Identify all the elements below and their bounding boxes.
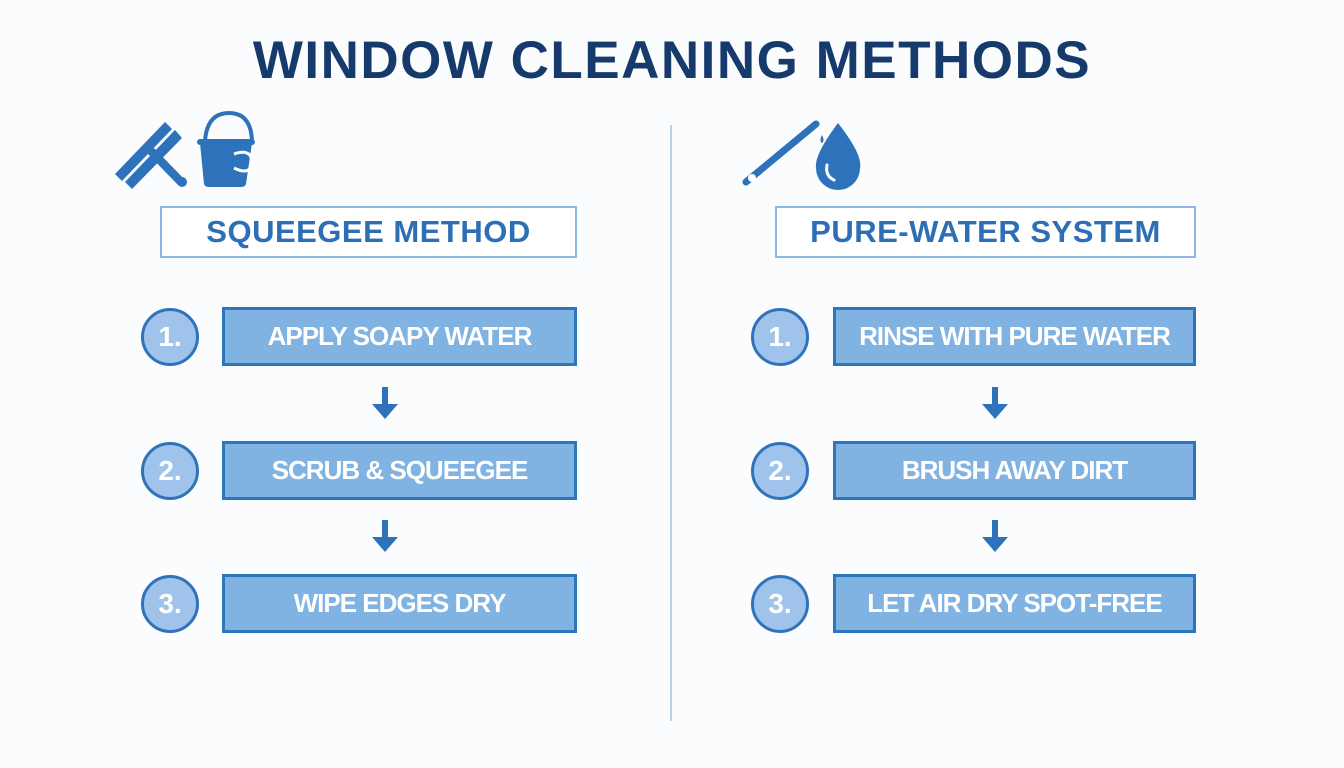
panel: pure-water system header: PURE-WATER SYSTEM [810,214,1161,249]
arrow [372,520,398,552]
step 3 [141,575,199,633]
step 2 [751,442,809,500]
icon: squeegee and bucket [115,111,255,189]
panel: squeegee method header [160,206,577,258]
panel: pure-water system header [775,206,1196,258]
step 1 [751,308,809,366]
step 1 [141,308,199,366]
step 2 [141,442,199,500]
arrow [372,387,398,419]
step 1: 1. [158,321,182,352]
step 3: 3. [158,588,182,619]
step 3 [751,575,809,633]
left steps: SCRUB & SQUEEGEE [272,455,527,485]
arrow [982,387,1008,419]
left steps: APPLY SOAPY WATER [268,321,531,351]
step 1: 1. [768,321,792,352]
right steps [751,307,1196,633]
right steps: BRUSH AWAY DIRT [902,455,1127,485]
icon: pole and water drop [742,120,860,190]
left steps [141,307,577,633]
step 2: 2. [768,455,792,486]
panel: squeegee method header: SQUEEGEE METHOD [206,214,531,249]
right steps: LET AIR DRY SPOT-FREE [867,588,1162,618]
divider [670,125,672,721]
left steps: WIPE EDGES DRY [294,588,505,618]
step 3: 3. [768,588,792,619]
right steps: RINSE WITH PURE WATER [859,321,1170,351]
step 2: 2. [158,455,182,486]
title: WINDOW CLEANING METHODS [253,31,1091,90]
arrow [982,520,1008,552]
